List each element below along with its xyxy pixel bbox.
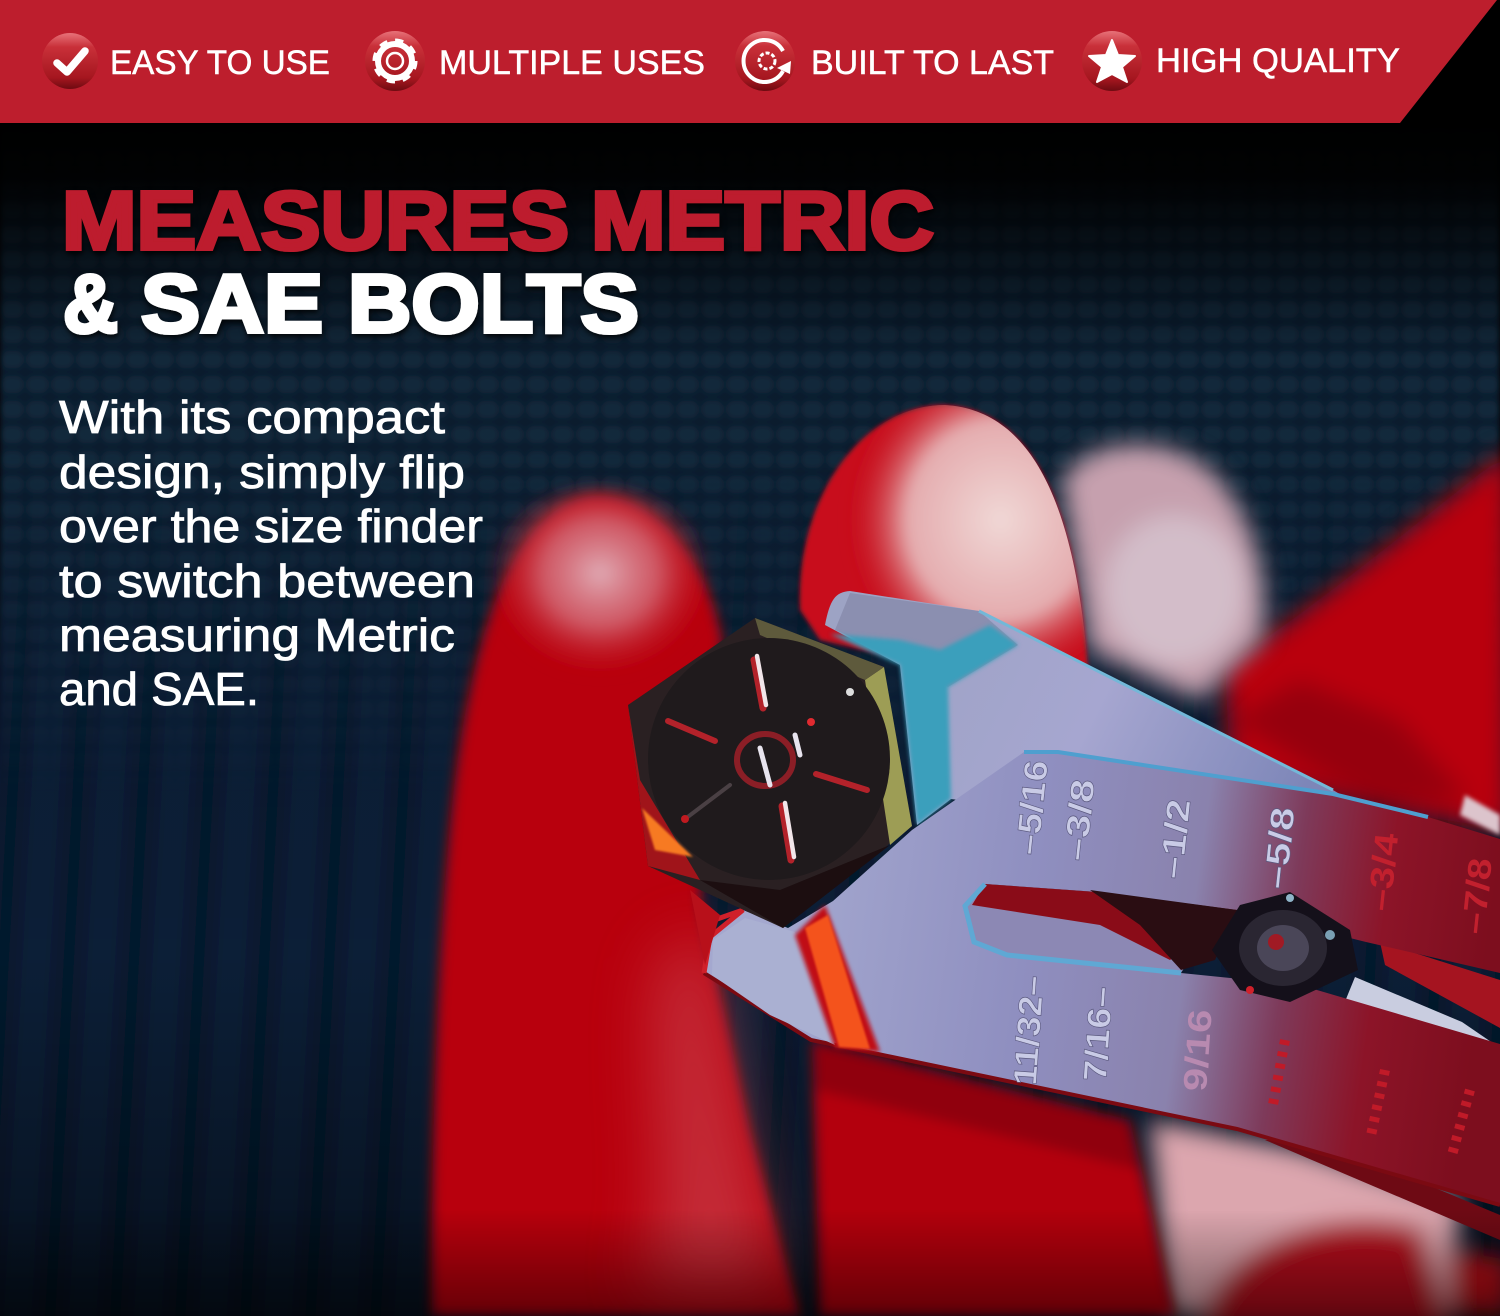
feature: built to last: BUILT TO LAST: [811, 44, 1054, 82]
third finger: [1062, 445, 1264, 700]
photo: hand holding the size finder: [0, 355, 1500, 1316]
engraved size labels: 9/16: [1176, 1008, 1219, 1092]
size finder rear leaf: [1265, 942, 1500, 1240]
left finger: [432, 496, 800, 1316]
engraved size labels: [1006, 758, 1499, 1092]
feature: built to last: [735, 31, 1054, 91]
bolt markings: [668, 656, 867, 860]
small slider bolt: [1212, 892, 1358, 1002]
slot showing rear leaf: [965, 884, 1237, 973]
feature: multiple uses: MULTIPLE USES: [439, 44, 705, 82]
size finder lower leaf: [700, 752, 1500, 1205]
engraved dotted marks on the red end: [1272, 1040, 1470, 1155]
left lobe: [712, 918, 835, 1045]
middle finger lower segment: [812, 1040, 1175, 1316]
bottom darkening: [0, 1210, 1500, 1316]
pale sliver behind tool tip: [1460, 795, 1500, 835]
top banner: [0, 0, 1497, 123]
engraved size labels: 11/32–: [1006, 974, 1051, 1086]
engraved size labels: –3/4: [1360, 831, 1405, 913]
engraved size labels: –3/8: [1056, 777, 1102, 863]
heading: SAE: [141, 257, 323, 350]
feature: high quality: HIGH QUALITY: [1156, 42, 1400, 80]
feature: easy to use: EASY TO USE: [110, 44, 330, 82]
feature: high quality: [1082, 31, 1400, 91]
body text: over the size finder: [59, 500, 483, 552]
body text: With its compact: [59, 391, 445, 443]
hex bolt head: [628, 618, 912, 965]
icon: star: [1082, 31, 1142, 91]
body text: [59, 391, 483, 715]
right hand red background fingers: [1150, 450, 1500, 1316]
engraved size labels: –1/2: [1152, 797, 1197, 881]
engraved size labels: –7/8: [1454, 856, 1499, 936]
heading: &: [63, 257, 118, 350]
heading: METRIC: [591, 174, 934, 267]
heading: [62, 174, 934, 350]
body text: measuring Metric: [59, 609, 455, 661]
body text: design, simply flip: [59, 446, 465, 498]
body text: and SAE.: [59, 663, 259, 715]
highlight edge: [704, 973, 1500, 1205]
icon: check mark: [42, 33, 98, 89]
body text: to switch between: [59, 555, 475, 607]
middle finger: [796, 402, 1091, 666]
icon: cycle gear: [735, 31, 795, 91]
size finder upper leaf: [825, 591, 1400, 830]
heading: MEASURES: [62, 174, 569, 267]
top right black corner: [1380, 0, 1500, 125]
icon: gear: [365, 31, 425, 91]
feature: easy to use: [42, 33, 330, 89]
engraved size labels: –5/8: [1256, 805, 1302, 891]
engraved size labels: 7/16–: [1076, 985, 1120, 1082]
red reflection on leaf: [795, 905, 880, 1052]
engraved size labels: –5/16: [1008, 758, 1055, 857]
feature: multiple uses: [365, 31, 705, 91]
heading: BOLTS: [348, 257, 639, 350]
